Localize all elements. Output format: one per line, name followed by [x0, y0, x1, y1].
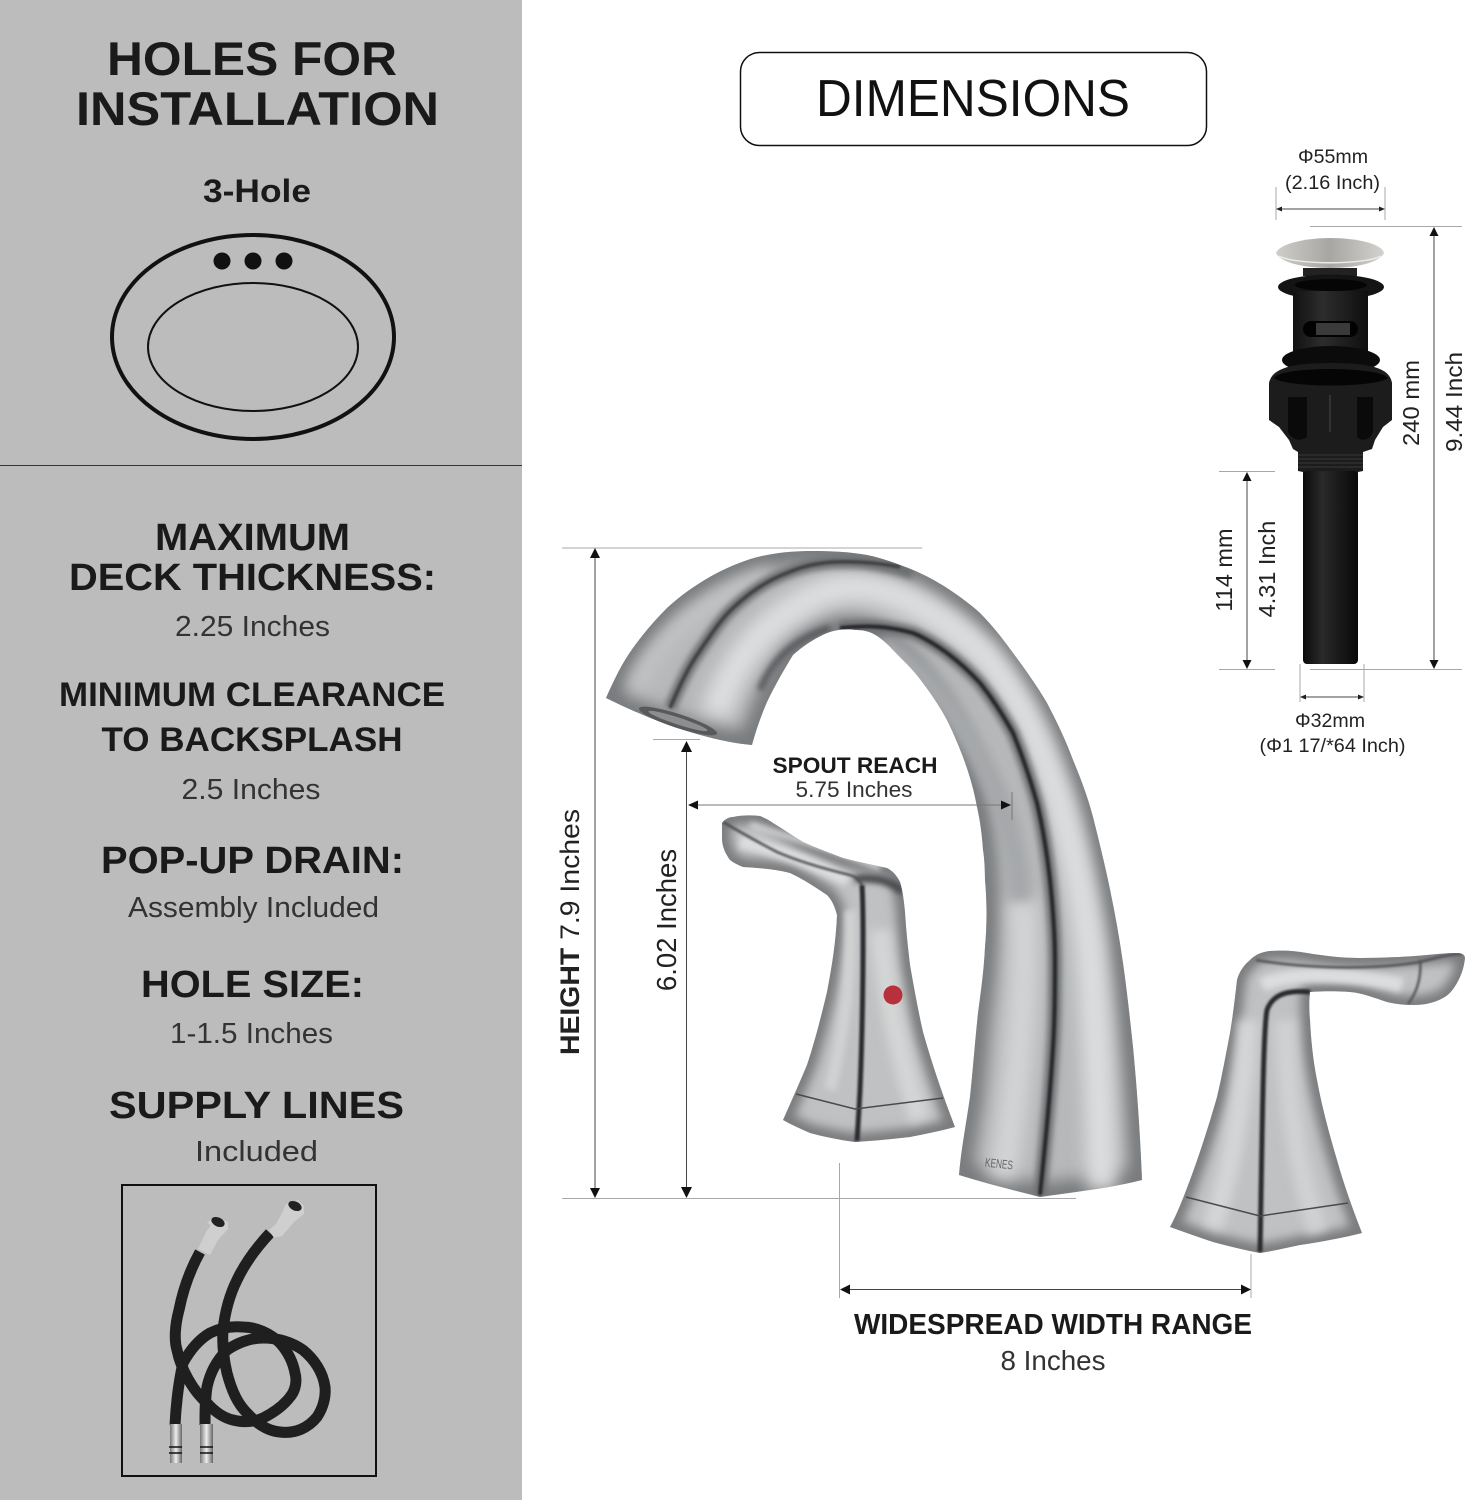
spec: maximum deck thickness — [69, 517, 436, 643]
dimension: spout height — [651, 740, 700, 1198]
drain assembly — [1269, 238, 1392, 664]
supply hoses image box — [122, 1185, 376, 1476]
dimension: height: HEIGHT 7.9 Inches — [555, 809, 585, 1055]
heading: holes for installation: INSTALLATION — [76, 82, 439, 135]
dimension: spout height: 6.02 Inches — [651, 849, 682, 991]
spec: minimum clearance to backsplash: 2.5 Inches — [182, 774, 320, 806]
drain dimension: tailpiece length: 114 mm — [1211, 528, 1237, 612]
drain dimension: total height: 240 mm — [1398, 360, 1424, 446]
drain dimension: cap diameter: (2.16 Inch) — [1285, 173, 1380, 194]
spec: supply lines — [109, 1085, 404, 1168]
spec: maximum deck thickness: MAXIMUM — [155, 517, 350, 559]
faucet spout — [600, 551, 1142, 1197]
drain dimension: cap diameter: Φ55mm — [1298, 147, 1368, 168]
spec: minimum clearance to backsplash: TO BACKSPLASH — [102, 721, 402, 759]
left handle — [722, 815, 955, 1142]
panel: installation specs — [0, 0, 522, 1500]
spec: pop-up drain: POP-UP DRAIN: — [101, 840, 404, 882]
dimension: widespread width: WIDESPREAD WIDTH RANGE — [854, 1309, 1252, 1341]
dimension: spout reach: SPOUT REACH — [772, 753, 938, 778]
drain dimension: pipe diameter: (Φ1 17/*64 Inch) — [1260, 736, 1406, 757]
heading: dimensions — [740, 52, 1206, 146]
heading: holes for installation: HOLES FOR — [107, 32, 397, 85]
spec: minimum clearance to backsplash — [59, 676, 445, 806]
drain dimension: total height: 9.44 Inch — [1441, 352, 1467, 452]
dimension: height — [555, 548, 1076, 1198]
drain dimension: pipe diameter — [1260, 664, 1406, 757]
spec: pop-up drain: Assembly Included — [128, 892, 379, 924]
spec: hole size: HOLE SIZE: — [141, 964, 364, 1006]
icon: sink with three holes — [112, 235, 394, 439]
spec: supply lines: SUPPLY LINES — [109, 1085, 404, 1127]
spec: pop-up drain — [101, 840, 404, 924]
spec: maximum deck thickness: 2.25 Inches — [175, 611, 330, 643]
drain dimension: total height — [1310, 226, 1467, 670]
spec: hole size: 1-1.5 Inches — [170, 1018, 333, 1050]
hot indicator — [884, 986, 902, 1004]
heading: dimensions: DIMENSIONS — [816, 70, 1130, 128]
dimension: widespread width — [840, 1163, 1252, 1376]
dimension: spout reach: 5.75 Inches — [796, 777, 912, 802]
spec: supply lines: Included — [195, 1136, 318, 1168]
spec: maximum deck thickness: DECK THICKNESS: — [69, 557, 436, 599]
drain cap — [1276, 238, 1384, 268]
spec: minimum clearance to backsplash: MINIMUM CLEARANCE — [59, 676, 445, 714]
drain dimension: tailpiece length: 4.31 Inch — [1254, 521, 1280, 617]
drain dimension: tailpiece length — [1211, 472, 1280, 670]
dimension: widespread width: 8 Inches — [1000, 1345, 1106, 1376]
dimension: spout reach — [688, 753, 1012, 820]
drain body — [1269, 268, 1392, 664]
drain dimension: cap diameter — [1276, 147, 1385, 220]
heading: holes for installation — [76, 32, 439, 135]
spec: hole size — [141, 964, 364, 1050]
brand mark: KENES — [984, 1156, 1014, 1172]
drain dimension: pipe diameter: Φ32mm — [1295, 711, 1365, 732]
label: 3-hole: 3-Hole — [203, 173, 311, 209]
right handle — [1170, 951, 1465, 1253]
aerator — [637, 702, 719, 740]
